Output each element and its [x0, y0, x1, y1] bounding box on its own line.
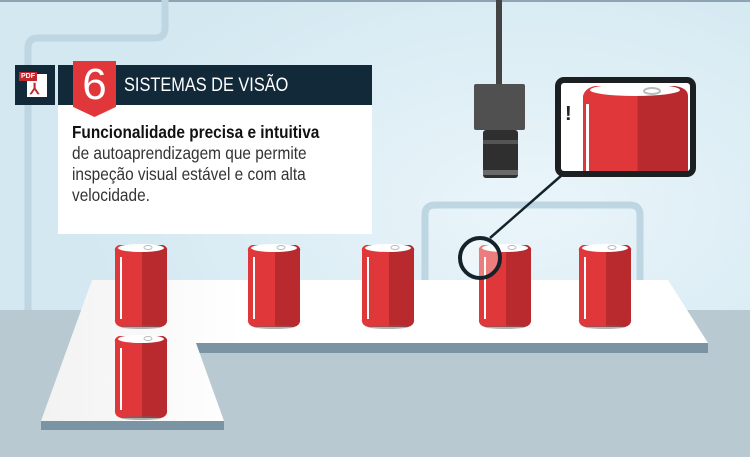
icon: pdf [15, 65, 55, 105]
text panel [58, 105, 372, 234]
callout: zoomed can: ! [565, 103, 572, 125]
callout: zoomed can [555, 77, 696, 177]
background pipes [28, 0, 640, 310]
text panel: velocidade. [72, 185, 150, 205]
conveyor table [41, 280, 708, 430]
icon: pdf: PDF [21, 73, 35, 80]
icon: pdf: ⅄ [30, 81, 39, 98]
camera [474, 0, 525, 178]
text panel: Funcionalidade precisa e intuitiva [72, 122, 319, 142]
heading bar [58, 65, 372, 105]
inspection circle and pointer line [460, 168, 570, 278]
text panel: inspeção visual estável e com alta [72, 164, 306, 184]
number badge: 6 [82, 60, 107, 109]
text panel: de autoaprendizagem que permite [72, 143, 307, 163]
heading text: SISTEMAS DE VISÃO [124, 75, 288, 96]
cans [115, 244, 631, 420]
floor [0, 310, 750, 457]
number badge [73, 61, 116, 117]
